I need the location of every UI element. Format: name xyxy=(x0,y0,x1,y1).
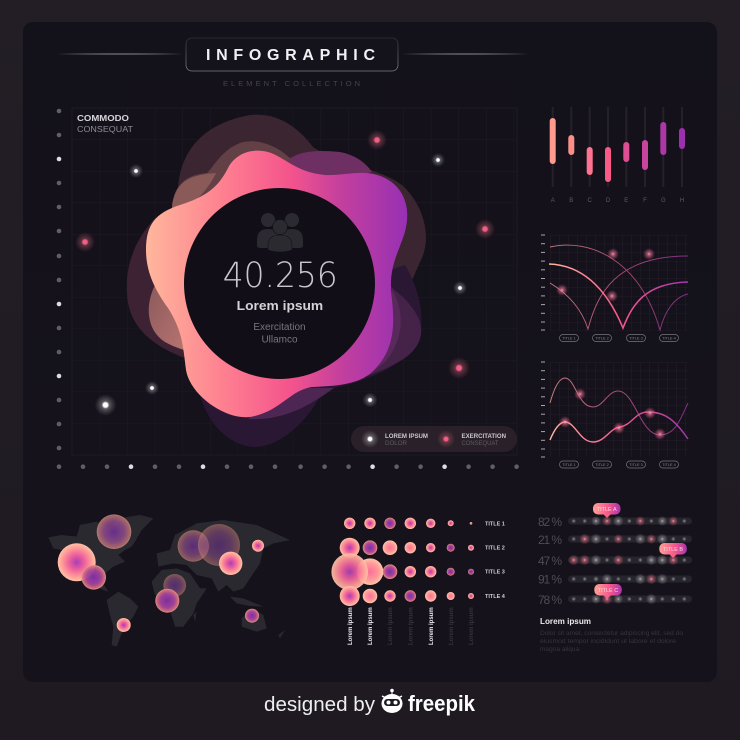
row 82 percent dots xyxy=(571,516,687,526)
arc line chart: TITLE 2 xyxy=(595,336,609,340)
back layer: left dark blob xyxy=(127,218,200,358)
arc line chart: TITLE 1 xyxy=(562,336,576,340)
callout: title c xyxy=(594,584,622,599)
title box xyxy=(186,38,398,71)
matrix column labels: Lorem ipsum xyxy=(469,607,475,645)
scatter points xyxy=(75,130,495,416)
text block: lorem ipsum: Lorem ipsum xyxy=(540,617,591,626)
callout: title c: TITLE C xyxy=(598,588,618,594)
back layer: right purple blob xyxy=(350,270,421,382)
chart label: commodo consequat: COMMODO xyxy=(77,113,129,123)
back layer: top right purple blob xyxy=(288,151,372,180)
left axis dots xyxy=(57,109,61,450)
arc line chart: TITLE 3 xyxy=(629,336,643,340)
row 47 percent dots xyxy=(568,554,687,566)
wave line chart: TITLE 4 xyxy=(662,463,676,467)
wave line chart: TITLE 2 xyxy=(595,463,609,467)
back layer: left peach blob xyxy=(149,285,186,350)
matrix column labels: Lorem ipsum xyxy=(449,607,455,645)
arc line chart xyxy=(541,234,688,342)
percent labels: 91 % xyxy=(538,572,562,586)
world map xyxy=(48,514,290,647)
map bubbles xyxy=(58,514,264,632)
back layer: dark purple lower blob xyxy=(200,265,422,447)
footer credit: designed by xyxy=(264,694,375,716)
back layer: bottom magenta fold xyxy=(248,388,334,419)
matrix row titles: TITLE 3 xyxy=(485,570,505,576)
matrix column labels: Lorem ipsum xyxy=(388,607,394,645)
percent labels: 82 % xyxy=(538,515,562,529)
matrix column labels: Lorem ipsum xyxy=(348,607,354,645)
wave line chart xyxy=(541,362,688,468)
range bar chart: H xyxy=(680,198,684,204)
center circle xyxy=(184,188,375,379)
matrix column labels: Lorem ipsum xyxy=(368,607,374,645)
matrix row titles: TITLE 2 xyxy=(485,546,505,552)
row tracks xyxy=(568,518,692,602)
row 21 percent dots xyxy=(571,534,687,544)
back layer: top peach blob xyxy=(172,141,322,235)
chart label: commodo consequat: CONSEQUAT xyxy=(77,124,133,134)
callout: title a: TITLE A xyxy=(597,507,617,513)
text block: lorem ipsum: Dolor sit amet, consectetur adipiscing elit, sed do xyxy=(540,631,684,637)
footer credit xyxy=(264,689,476,716)
callout: title a xyxy=(593,503,620,518)
blob chart xyxy=(127,115,426,447)
scatter legend: EXERCITATION xyxy=(462,434,506,440)
percent dot rows xyxy=(538,503,692,607)
back layer: brown blob xyxy=(178,115,426,330)
lorem ipsum label: Lorem ipsum xyxy=(237,298,323,313)
range bar chart: C xyxy=(588,198,593,204)
back layer: right magenta fold xyxy=(368,290,401,376)
callout: title b: TITLE B xyxy=(663,547,683,553)
text block: lorem ipsum: eiusmod tempor incididunt ut labore et dolore xyxy=(540,639,677,645)
matrix column labels xyxy=(348,607,475,645)
range bar chart: B xyxy=(569,198,573,204)
wave line chart: TITLE 1 xyxy=(562,463,576,467)
range bar chart: F xyxy=(643,198,647,204)
main scatter grid xyxy=(72,108,517,455)
matrix column labels: Lorem ipsum xyxy=(429,607,435,645)
range bar chart: A xyxy=(551,198,555,204)
callout: title b xyxy=(659,543,687,558)
scatter legend xyxy=(351,426,517,452)
row 91 percent dots xyxy=(571,574,687,584)
arc line chart: TITLE 4 xyxy=(662,336,676,340)
exercitation label: Exercitation xyxy=(253,322,306,333)
matrix row titles: TITLE 4 xyxy=(485,594,506,600)
percent labels: 21 % xyxy=(538,533,562,547)
footer credit: freepik xyxy=(408,691,476,716)
percent labels: 78 % xyxy=(538,593,562,607)
ullamco label: Ullamco xyxy=(261,334,298,346)
percent labels: 47 % xyxy=(538,554,562,568)
range bar chart: E xyxy=(624,198,628,204)
range bar chart: G xyxy=(661,198,666,204)
header xyxy=(57,38,528,88)
bottom axis dots xyxy=(57,464,519,469)
title: INFOGRAPHIC xyxy=(206,47,375,64)
row 78 percent dots xyxy=(571,594,687,604)
scatter legend: DOLOR xyxy=(385,441,408,447)
percent labels xyxy=(538,515,562,607)
scatter legend: CONSEQUAT xyxy=(462,441,499,447)
range bar chart: D xyxy=(606,198,611,204)
main gradient blob xyxy=(146,151,407,417)
bubble matrix xyxy=(331,518,506,645)
chart label: commodo consequat xyxy=(77,113,133,134)
range bar chart xyxy=(550,107,685,204)
subtitle: ELEMENT COLLECTION xyxy=(223,79,360,88)
text block: lorem ipsum: magna aliqua. xyxy=(540,647,581,653)
wave line chart: TITLE 3 xyxy=(629,463,643,467)
big number: 40.256 xyxy=(223,256,338,296)
matrix column labels: Lorem ipsum xyxy=(408,607,414,645)
icon: people xyxy=(257,213,303,252)
scatter legend: LOREM IPSUM xyxy=(385,434,428,440)
matrix row titles: TITLE 1 xyxy=(485,521,505,527)
matrix row titles xyxy=(485,521,506,600)
back layer: top left peach fold xyxy=(172,173,216,212)
icon: freepik logo xyxy=(382,689,402,713)
text block: lorem ipsum xyxy=(540,617,684,653)
